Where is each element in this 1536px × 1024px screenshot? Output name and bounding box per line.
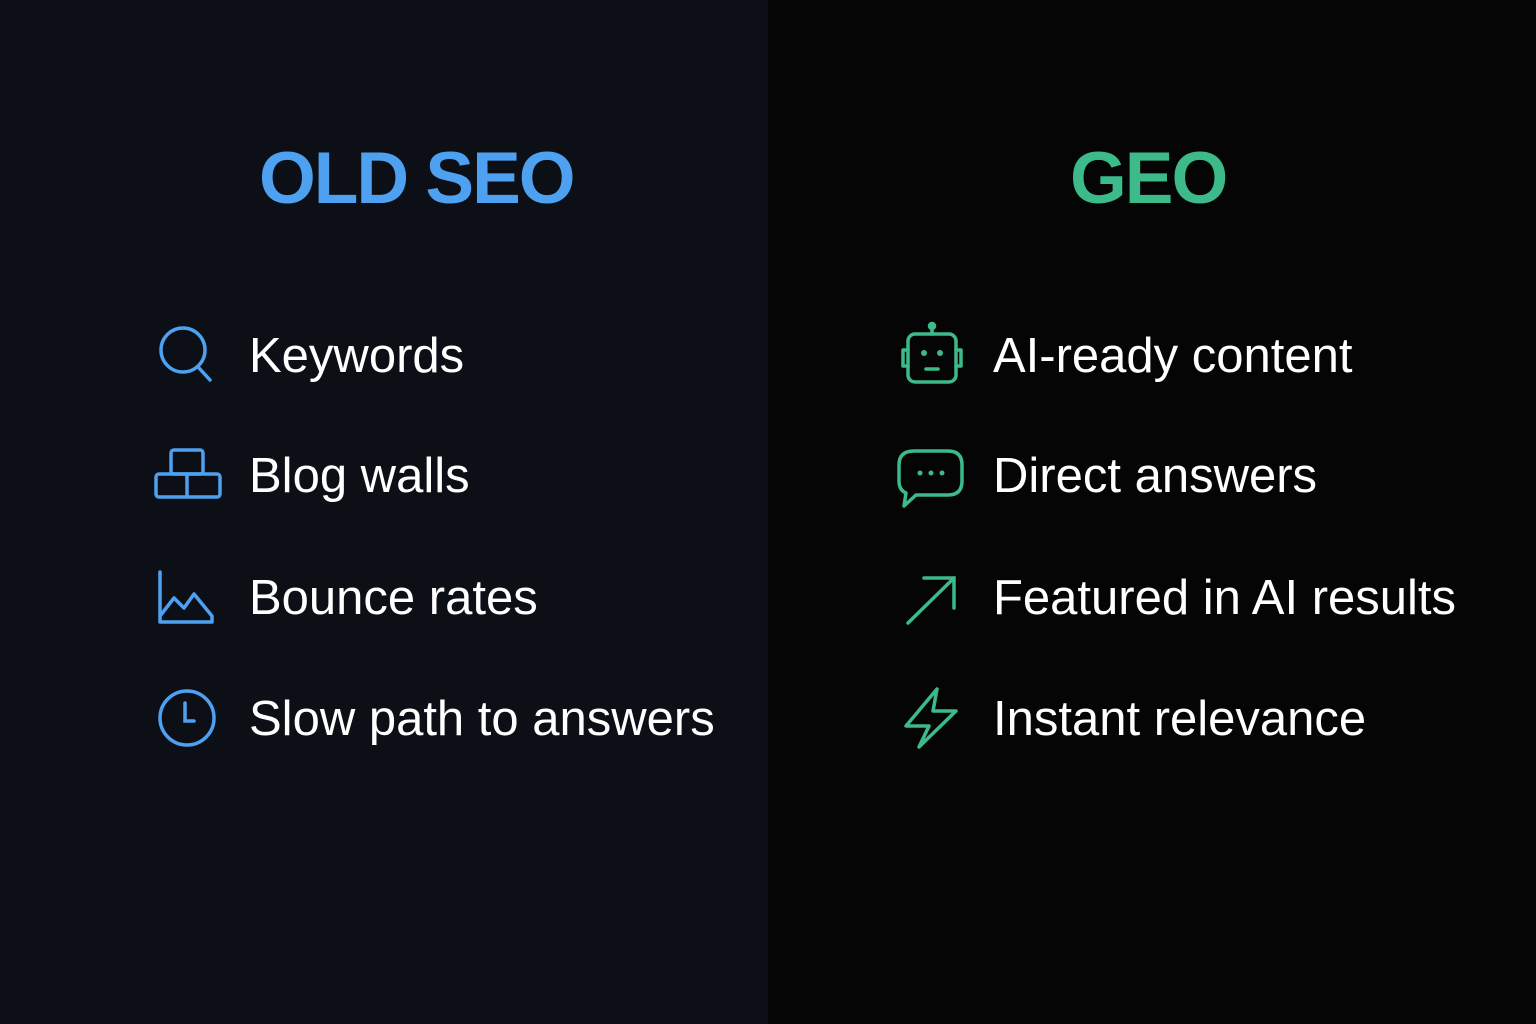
item: ai-ready bbox=[901, 322, 1353, 384]
text: instant relevance: Instant relevance bbox=[993, 692, 1366, 746]
icon: magnifier bbox=[159, 326, 212, 382]
icon: clock bbox=[158, 689, 216, 747]
text: direct answers: Direct answers bbox=[993, 449, 1317, 503]
text: keywords: Keywords bbox=[249, 329, 464, 383]
icon: up-right arrow bbox=[906, 576, 956, 625]
panel: geo bbox=[768, 0, 1536, 1024]
text: bounce rates: Bounce rates bbox=[249, 571, 538, 625]
item: featured bbox=[906, 571, 1456, 625]
title: old seo: OLD SEO bbox=[259, 138, 574, 219]
item: bounce rates bbox=[158, 570, 538, 625]
title: geo: GEO bbox=[1070, 138, 1226, 219]
text: slow path: Slow path to answers bbox=[249, 692, 715, 746]
item: keywords bbox=[159, 326, 464, 383]
icon: area chart bbox=[158, 570, 214, 624]
icon: bricks bbox=[154, 448, 222, 499]
item: instant relevance bbox=[904, 687, 1366, 749]
item: blog walls bbox=[154, 448, 470, 503]
item: direct answers bbox=[897, 449, 1317, 508]
icon: chat bubble bbox=[897, 449, 964, 508]
text: blog walls: Blog walls bbox=[249, 449, 470, 503]
text: ai-ready: AI-ready content bbox=[993, 329, 1353, 383]
icon: robot bbox=[901, 322, 963, 384]
panel: old seo bbox=[0, 0, 768, 1024]
item: slow path bbox=[158, 689, 715, 747]
text: featured: Featured in AI results bbox=[993, 571, 1456, 625]
icon: lightning bbox=[904, 687, 958, 749]
